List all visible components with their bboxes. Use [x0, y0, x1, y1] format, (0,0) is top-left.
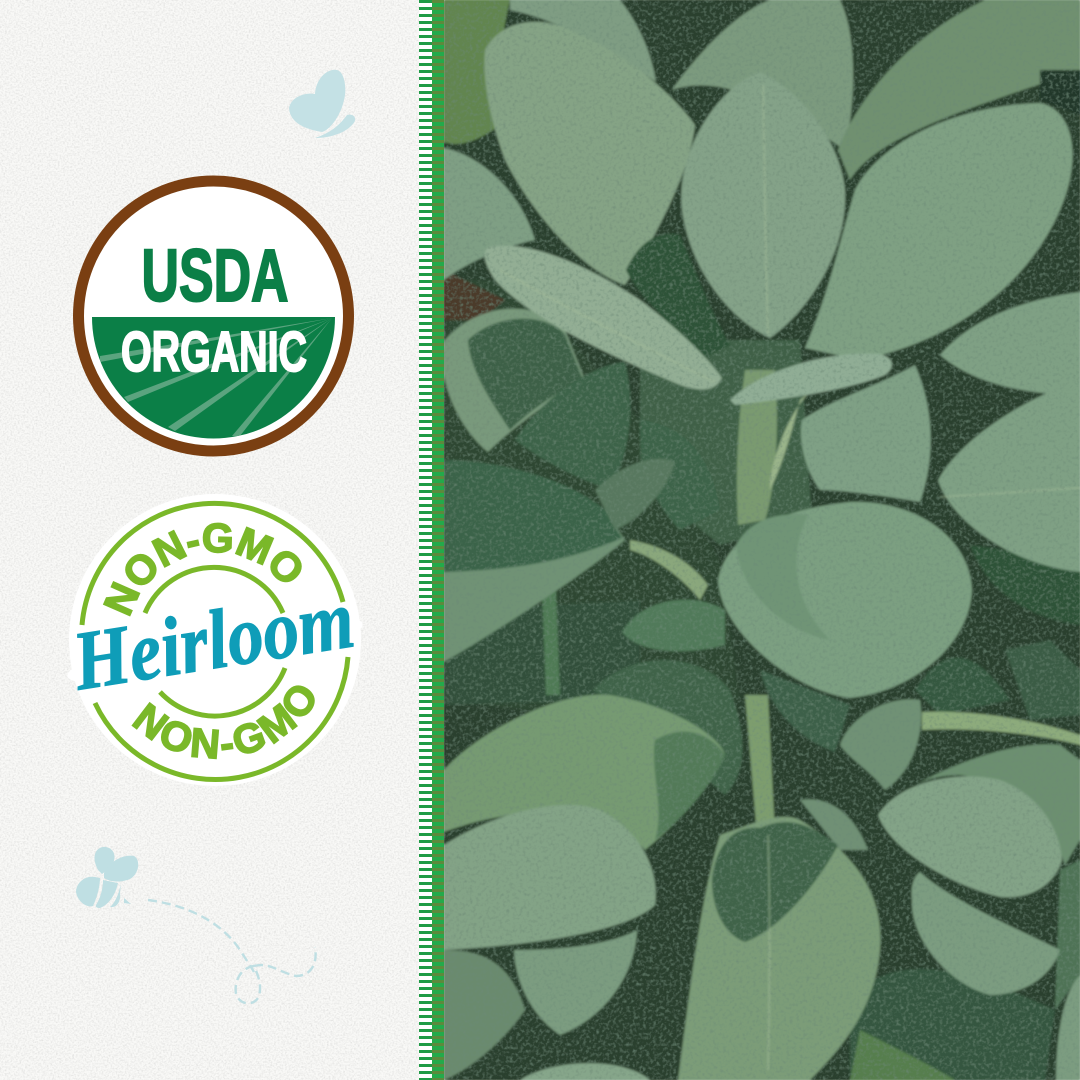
- top row of leaves: [444, 0, 1080, 395]
- decorative stripe border: [419, 0, 444, 1080]
- bee: [76, 847, 138, 908]
- NON-GMO top text: NON-GMO: [102, 522, 302, 616]
- icon: butterfly: [289, 70, 355, 138]
- middle row of leaves: [443, 246, 1080, 698]
- USDA Organic seal: [78, 181, 348, 451]
- seal rings: [82, 503, 348, 780]
- USDA heading: USDA: [142, 234, 288, 317]
- ORGANIC label: ORGANIC: [121, 320, 307, 384]
- dashed flight path: [148, 900, 316, 1003]
- NON-GMO bottom text: NON-GMO: [132, 685, 315, 760]
- Heirloom script: Heirloom: [66, 573, 360, 709]
- Non-GMO Heirloom seal: [66, 494, 363, 786]
- sage leaf photograph: [443, 0, 1080, 1080]
- green field segment: [90, 316, 340, 441]
- back layer of dark leaves: [444, 0, 1080, 1080]
- leaf midribs: [500, 85, 1080, 1070]
- lower row of leaves: [444, 695, 1080, 1080]
- icon: bee with dashed flight path: [76, 847, 316, 1003]
- canvas panel background: [0, 0, 420, 1080]
